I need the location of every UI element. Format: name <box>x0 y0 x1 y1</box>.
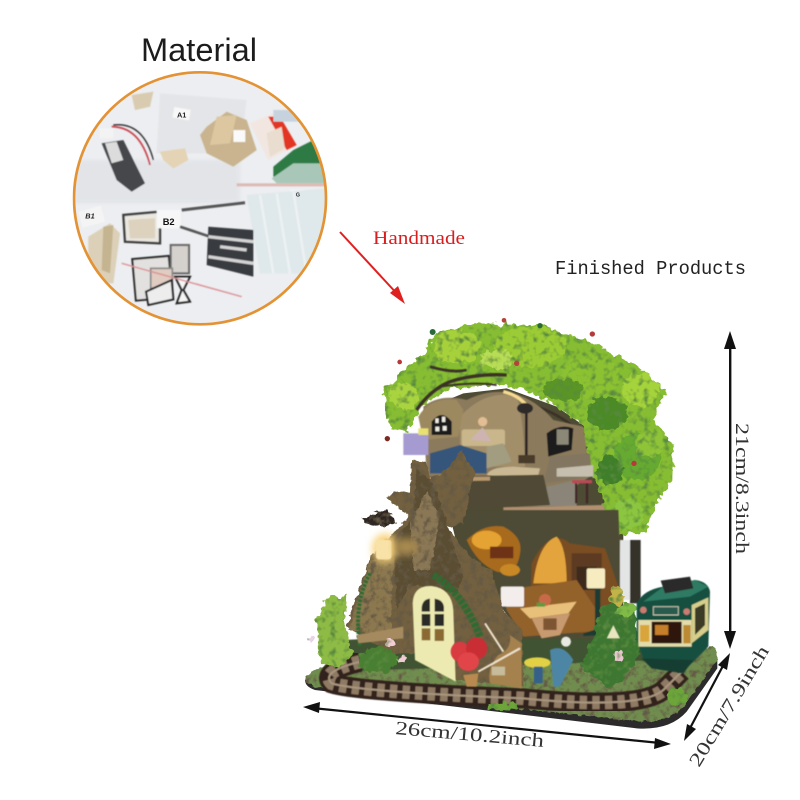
title: Material: Material <box>141 32 257 68</box>
bed <box>462 429 505 446</box>
product photo: treehouse model <box>305 318 717 729</box>
label: Handmade: Handmade <box>373 228 465 249</box>
label: height 21cm/8.3inch: 21cm/8.3inch <box>731 423 752 555</box>
B2 frame <box>123 212 160 243</box>
arrow: handmade red arrow <box>340 232 405 304</box>
panel: material photo circle: B2 <box>163 217 175 227</box>
left bush and ground plants <box>309 597 406 672</box>
base board <box>305 647 717 729</box>
wires and dark bag <box>102 140 145 192</box>
label: width 26cm/10.2inch: 26cm/10.2inch <box>395 718 545 752</box>
labels on bags: A1 <box>177 110 186 119</box>
floors and lower wall <box>427 475 641 638</box>
berries <box>385 318 637 466</box>
window frames <box>132 256 172 301</box>
panel: material photo circle <box>70 70 330 330</box>
warning sign <box>607 625 620 638</box>
foliage canopy <box>383 323 673 535</box>
round lit window <box>467 526 520 573</box>
floor lamp <box>525 413 528 457</box>
A-part bag wood pieces <box>200 112 257 167</box>
panel: material photo circle: B1 <box>85 212 95 221</box>
tree trunk <box>347 450 523 687</box>
wooden sign <box>357 627 403 643</box>
label: Finished Products: Finished Products <box>555 258 746 280</box>
stairs <box>537 480 577 507</box>
lantern <box>595 582 600 632</box>
upper room <box>403 392 593 507</box>
tracks <box>329 662 682 703</box>
wall lamp glow <box>372 534 418 563</box>
stool and blue figure <box>524 637 573 687</box>
burlap sack <box>478 623 522 688</box>
red flower pot <box>451 637 487 687</box>
house back fill <box>423 388 623 638</box>
arched cream door <box>413 586 456 682</box>
label: depth 20cm/7.9inch: 20cm/7.9inch <box>685 642 774 771</box>
lit arched room <box>529 538 618 635</box>
climbing vines <box>358 573 480 647</box>
red and white box <box>250 113 297 160</box>
right plants <box>487 587 688 711</box>
right upper wall <box>547 427 573 457</box>
branches <box>417 367 573 427</box>
panel: material photo circle: G <box>296 193 300 199</box>
arrow: depth dimension <box>684 653 730 741</box>
arrow: width dimension <box>303 702 671 749</box>
green foliage bag <box>273 140 327 177</box>
ground behind house <box>333 632 660 672</box>
B1 bag <box>80 207 104 226</box>
clear sheet <box>247 188 330 273</box>
lower interior <box>503 580 610 637</box>
black parts <box>207 227 253 277</box>
arrow: height dimension <box>724 331 736 649</box>
green tram <box>637 577 710 673</box>
